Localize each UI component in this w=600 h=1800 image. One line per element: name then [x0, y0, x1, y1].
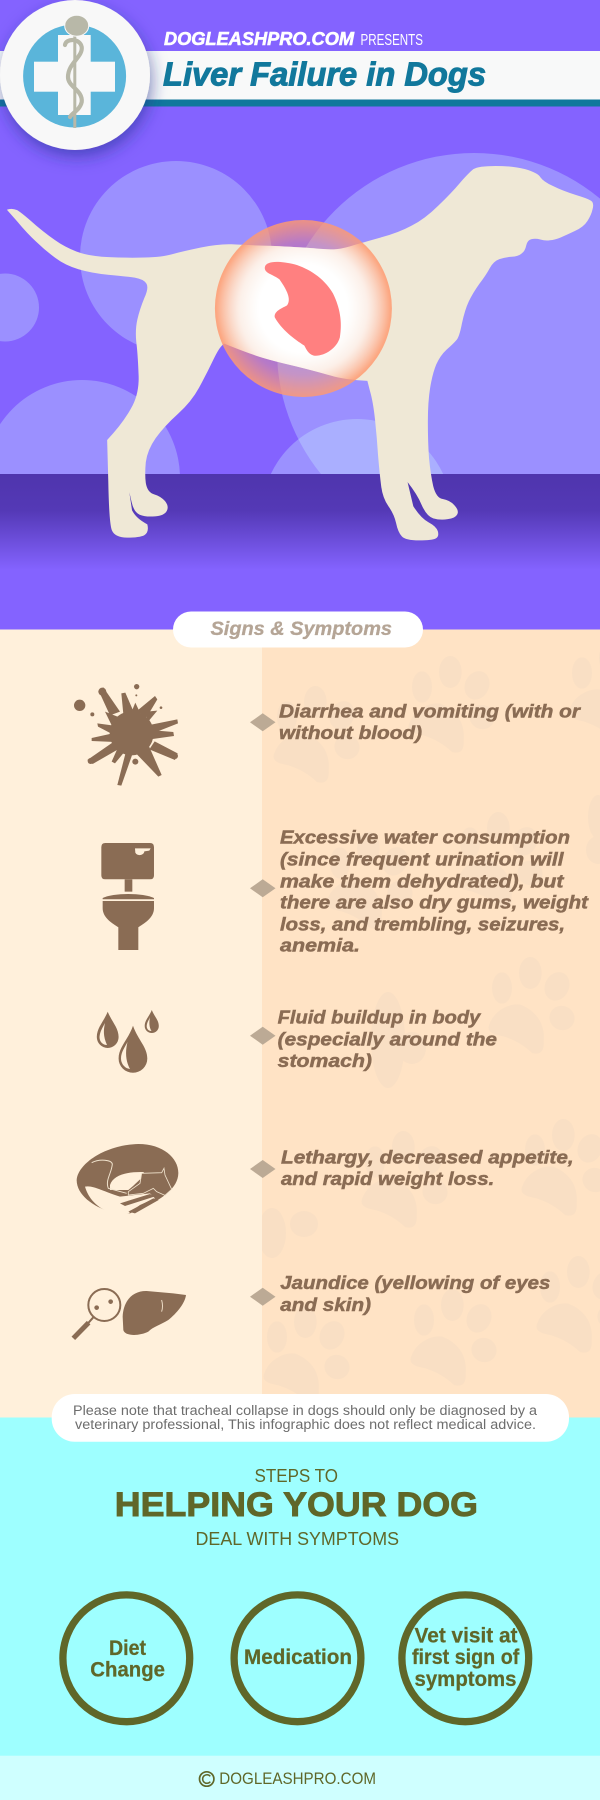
main title: Liver Failure in Dogs — [163, 56, 486, 93]
heading: helping your dog: STEPS TO — [254, 1466, 338, 1486]
heading: helping your dog — [115, 1466, 478, 1549]
marker — [250, 713, 276, 731]
text: Diarrhea and vomiting (with or — [279, 700, 582, 721]
text: make them dehydrated), but — [280, 870, 564, 891]
symptom 1 — [74, 684, 582, 786]
step: diet change — [63, 1595, 190, 1722]
icon: curled up dog — [77, 1144, 178, 1213]
symptom 4 — [77, 1144, 574, 1213]
icon: copyright — [200, 1772, 214, 1786]
disclaimer — [52, 1394, 569, 1442]
panel: steps background — [0, 1418, 600, 1756]
header band — [0, 51, 600, 106]
symptom 2 — [101, 826, 589, 956]
text — [278, 1006, 497, 1071]
icon: water drops — [97, 1010, 159, 1073]
symptom 5 — [73, 1272, 550, 1338]
text: there are also dry gums, weight — [280, 891, 589, 912]
symptom 3 — [97, 1006, 497, 1073]
step: medication: Medication — [244, 1646, 352, 1669]
text — [280, 826, 589, 956]
hero background — [0, 0, 600, 630]
text: (since frequent urination will — [280, 848, 564, 869]
text: without blood) — [279, 722, 422, 743]
presenter line: PRESENTS — [360, 32, 423, 49]
text: Fluid buildup in body — [278, 1006, 482, 1027]
marker — [250, 1288, 276, 1306]
footer — [0, 1756, 600, 1800]
step: medication — [234, 1595, 361, 1722]
step: vet visit — [402, 1595, 529, 1722]
heading pill: signs and symptoms: Signs & Symptoms — [210, 618, 392, 640]
text: and rapid weight loss. — [281, 1168, 494, 1189]
text: Lethargy, decreased appetite, — [281, 1146, 574, 1167]
logo badge — [0, 0, 150, 150]
marker — [250, 1027, 276, 1045]
step: diet change: Diet — [109, 1637, 146, 1660]
presenter line: DOGLEASHPRO.COM — [164, 29, 355, 49]
text: stomach) — [278, 1050, 372, 1071]
text — [280, 1272, 550, 1315]
step: vet visit: first sign of — [412, 1646, 520, 1669]
text: (especially around the — [278, 1028, 497, 1049]
dog silhouette — [7, 166, 593, 540]
step: diet change: Change — [90, 1659, 165, 1682]
text: and skin) — [280, 1294, 371, 1315]
title block — [163, 29, 486, 93]
icon: splatter — [74, 684, 178, 786]
icon: magnifier and liver — [73, 1289, 186, 1338]
step: vet visit: Vet visit at — [414, 1624, 518, 1647]
liver shape — [265, 262, 341, 356]
footer: DOGLEASHPRO.COM — [219, 1769, 376, 1788]
text: loss, and trembling, seizures, — [280, 913, 565, 934]
text — [279, 700, 582, 743]
marker — [250, 879, 276, 897]
icon: toilet — [101, 843, 154, 950]
step: vet visit: symptoms — [414, 1668, 516, 1691]
text: Excessive water consumption — [280, 826, 570, 847]
liver highlight — [215, 220, 392, 397]
disclaimer: Please note that tracheal collapse in dogs should only be diagnosed by a — [73, 1403, 538, 1418]
heading pill: signs and symptoms — [173, 612, 423, 648]
panel: signs and symptoms — [0, 630, 600, 1418]
text: Jaundice (yellowing of eyes — [280, 1272, 550, 1293]
marker — [250, 1160, 276, 1178]
paw print pattern — [258, 642, 600, 1403]
text: anemia. — [280, 935, 360, 956]
heading: helping your dog: HELPING YOUR DOG — [115, 1486, 478, 1524]
heading: helping your dog: DEAL WITH SYMPTOMS — [196, 1529, 399, 1549]
text — [281, 1146, 574, 1189]
disclaimer: veterinary professional, This infographic does not reflect medical advice. — [75, 1417, 536, 1432]
